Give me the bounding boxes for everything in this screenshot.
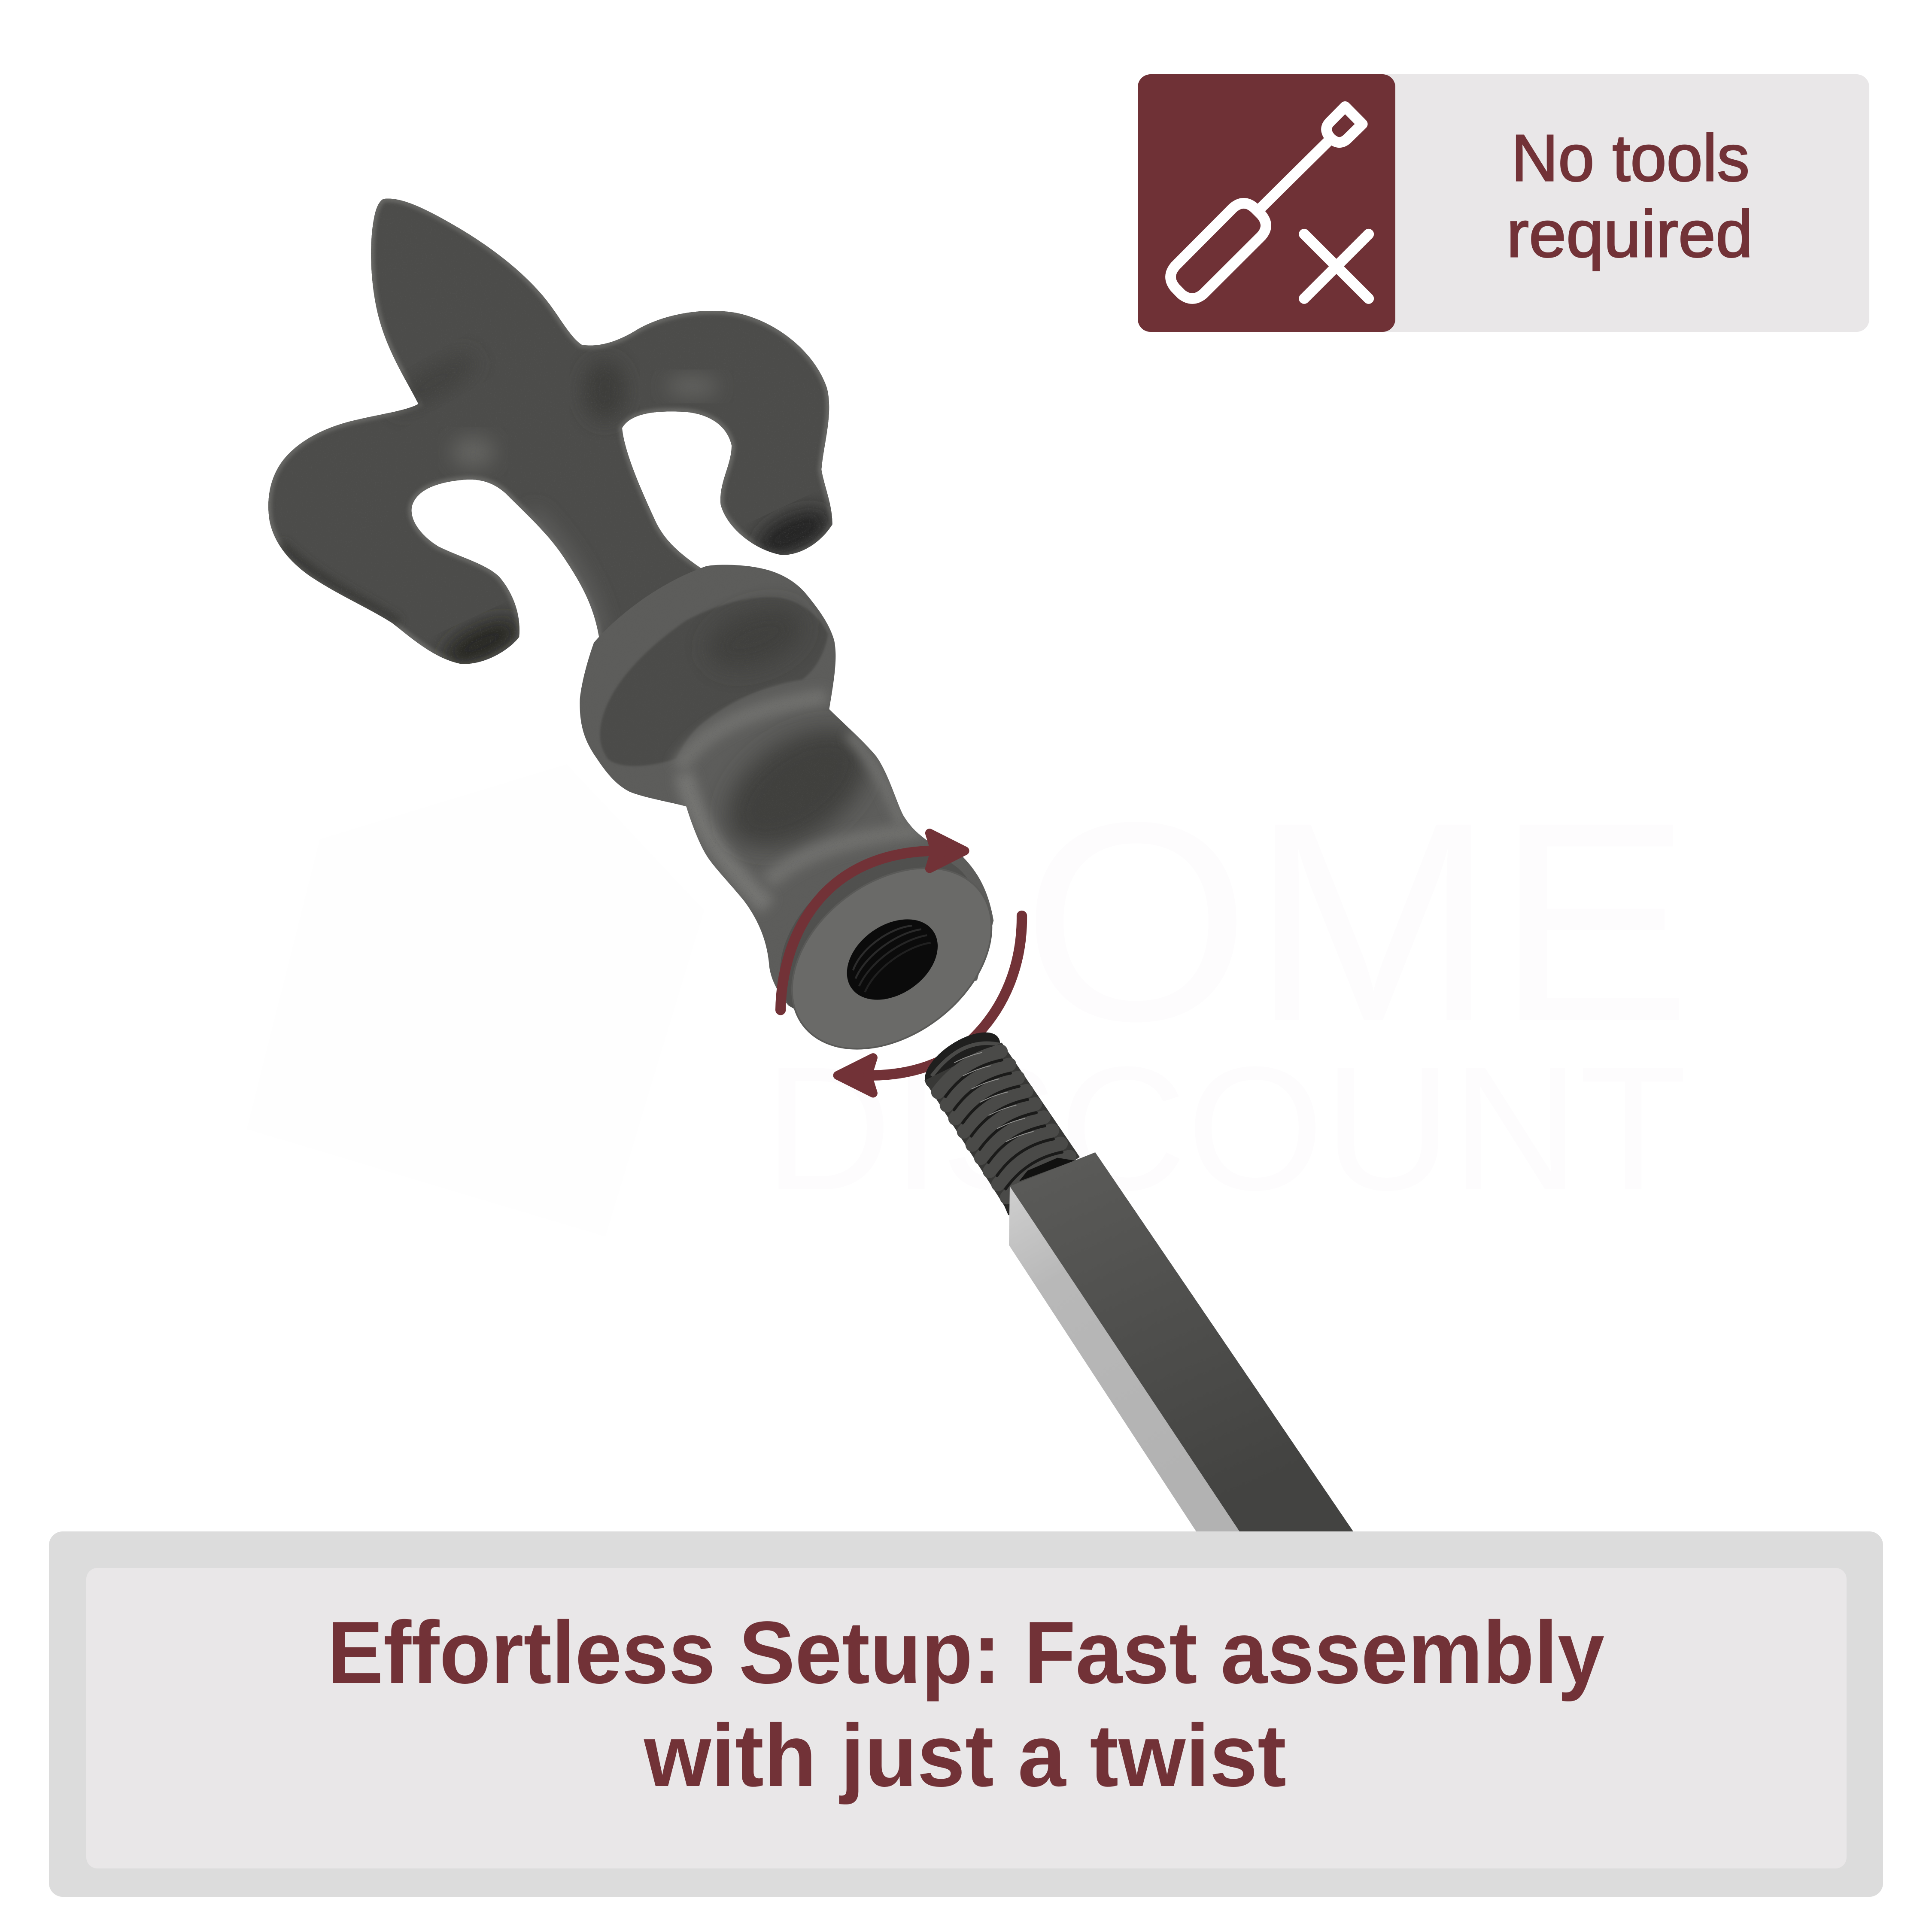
- finial: collar and body: [580, 565, 993, 1009]
- caption outer frame: [49, 1531, 1883, 1897]
- badge text: [1507, 121, 1753, 271]
- panel: bottom caption: [49, 1531, 1883, 1897]
- product: finial and rod: [258, 189, 1354, 1533]
- watermark: home discount logo: DISCOUNT: [764, 1030, 1687, 1227]
- caption heading: with just a twist: [644, 1706, 1286, 1805]
- icon: screwdriver with cross: [1171, 106, 1369, 298]
- badge text: required: [1507, 197, 1753, 271]
- threaded rod end: [915, 1021, 1080, 1216]
- badge background: [1138, 74, 1869, 332]
- caption heading: [327, 1603, 1604, 1805]
- caption inner panel: [86, 1568, 1847, 1868]
- watermark: home discount logo: OME: [1022, 763, 1692, 1080]
- badge icon panel: [1138, 74, 1395, 332]
- arrow: rotation arc lower, behind the thread: [838, 916, 1022, 1093]
- threaded hole: [832, 903, 953, 1016]
- badge text: No tools: [1511, 121, 1750, 195]
- caption heading: Effortless Setup: Fast assembly: [327, 1603, 1604, 1702]
- watermark: home discount logo: [247, 763, 1692, 1236]
- badge: no tools required: [1138, 74, 1869, 332]
- square rod: light side face: [1009, 1186, 1240, 1533]
- finial: flat end face with threaded hole: [757, 831, 1026, 1086]
- square rod: dark front face: [1010, 1152, 1354, 1533]
- arrow: rotation arc upper, over the finial: [781, 833, 965, 1010]
- finial: fleur-de-lis head: [258, 189, 850, 675]
